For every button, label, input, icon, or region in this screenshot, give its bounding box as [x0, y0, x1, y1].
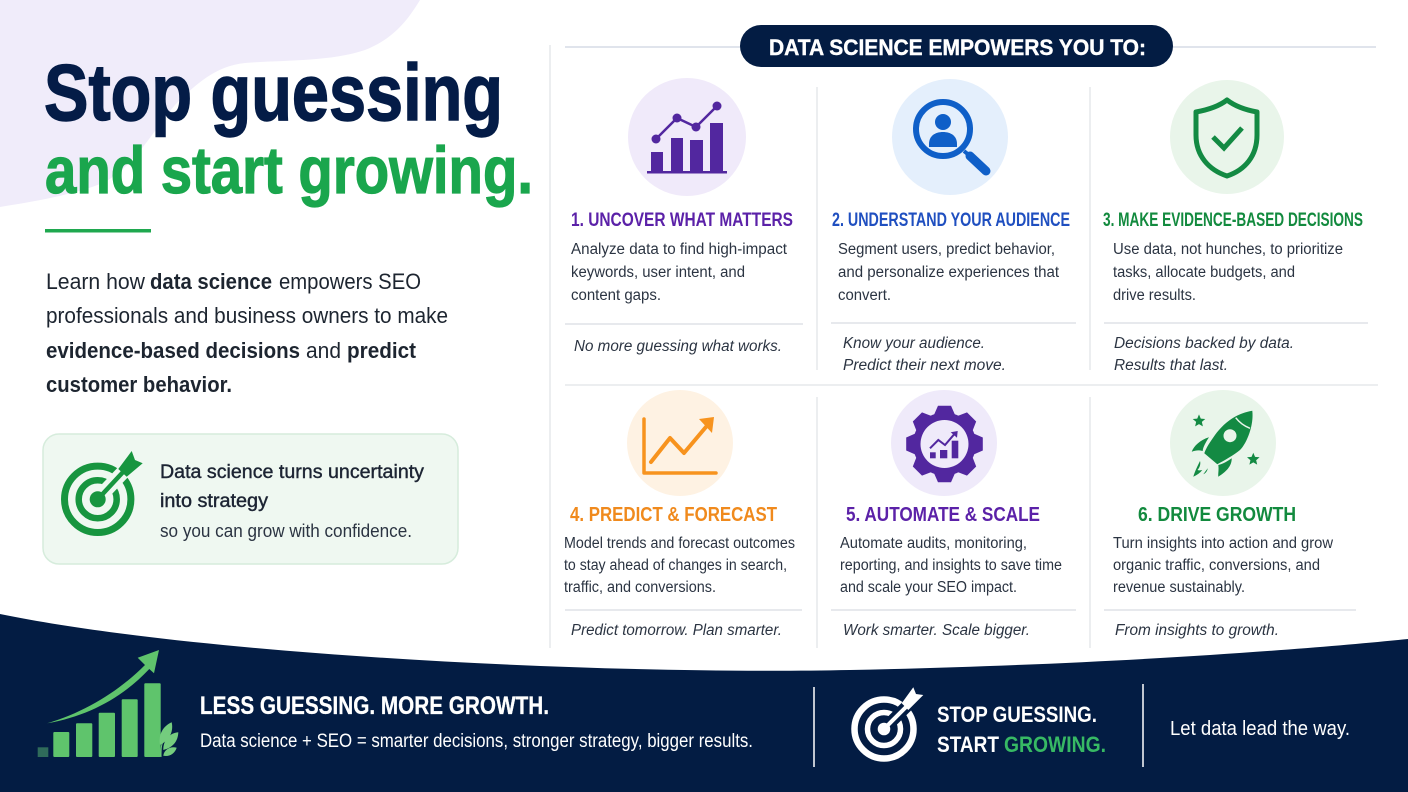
tagline: Decisions backed by data.	[1114, 335, 1294, 352]
intro paragraph: professionals and business owners to make	[46, 303, 448, 328]
intro paragraph: customer behavior.	[46, 372, 232, 397]
footer closing line: Let data lead the way.	[1170, 718, 1350, 740]
description	[838, 241, 1060, 304]
description: Automate audits, monitoring,	[840, 535, 1027, 552]
footer slogan: STOP GUESSING.	[937, 702, 1097, 727]
title: and start growing.	[45, 133, 533, 207]
description	[1113, 535, 1334, 596]
heading: 5. AUTOMATE & SCALE	[846, 504, 1040, 526]
description: Segment users, predict behavior,	[838, 241, 1055, 258]
footer headline: Data science + SEO = smarter decisions, stronger strategy, bigger results.	[200, 731, 753, 752]
footer slogan: GROWING.	[1004, 732, 1106, 757]
description: Use data, not hunches, to prioritize	[1113, 241, 1343, 258]
intro paragraph: data science	[150, 269, 272, 294]
callout: uncertainty into strategy	[43, 434, 458, 564]
icon: white target	[854, 687, 923, 758]
intro paragraph: predict	[347, 338, 417, 363]
tagline: From insights to growth.	[1115, 622, 1279, 639]
icon: green target	[64, 451, 143, 532]
heading: 1. UNCOVER WHAT MATTERS	[571, 210, 793, 231]
footer headline: LESS GUESSING. MORE GROWTH.	[200, 692, 549, 720]
title underline	[45, 229, 151, 232]
intro paragraph: and	[306, 338, 341, 363]
description	[571, 241, 788, 304]
description: traffic, and conversions.	[564, 579, 716, 596]
intro paragraph: evidence-based decisions	[46, 338, 300, 363]
description: revenue sustainably.	[1113, 579, 1245, 596]
description: Model trends and forecast outcomes	[564, 535, 795, 552]
intro paragraph: Learn how	[46, 269, 145, 294]
footer headline	[200, 692, 753, 752]
description	[564, 535, 795, 596]
icon: bar and line chart	[628, 78, 746, 196]
panel: 6 drive growth	[1104, 390, 1356, 639]
description: Turn insights into action and grow	[1113, 535, 1334, 552]
description: and personalize experiences that	[838, 264, 1060, 281]
description: content gaps.	[571, 287, 661, 304]
tagline: Work smarter. Scale bigger.	[843, 622, 1030, 639]
description: Analyze data to find high-impact	[571, 241, 788, 258]
description: convert.	[838, 287, 891, 304]
description: and scale your SEO impact.	[840, 579, 1017, 596]
panel: 3 make evidence-based decisions	[1103, 80, 1368, 374]
background blob	[0, 0, 420, 207]
footer slogan: START	[937, 732, 999, 757]
description: tasks, allocate budgets, and	[1113, 264, 1295, 281]
panel dividers	[550, 45, 1378, 648]
heading: 6. DRIVE GROWTH	[1138, 504, 1296, 526]
tagline: Results that last.	[1114, 357, 1228, 374]
description: reporting, and insights to save time	[840, 557, 1062, 574]
panel: 2 understand your audience	[831, 79, 1076, 374]
description	[840, 535, 1062, 596]
intro paragraph: empowers SEO	[279, 269, 421, 294]
callout text: Data science turns uncertainty	[160, 462, 425, 483]
icon: gear with chart	[891, 390, 997, 496]
title: Stop guessing	[44, 48, 503, 137]
heading: 2. UNDERSTAND YOUR AUDIENCE	[832, 210, 1070, 231]
footer slogan	[937, 702, 1106, 757]
description: to stay ahead of changes in search,	[564, 557, 787, 574]
tagline	[843, 335, 1006, 374]
callout text: into strategy	[160, 491, 269, 512]
description: organic traffic, conversions, and	[1113, 557, 1320, 574]
tagline: Predict their next move.	[843, 357, 1006, 374]
tagline	[1114, 335, 1294, 374]
heading: 4. PREDICT & FORECAST	[570, 504, 777, 526]
intro paragraph	[46, 269, 448, 397]
tagline: No more guessing what works.	[574, 338, 782, 355]
description: keywords, user intent, and	[571, 264, 745, 281]
panel: 1 uncover what matters	[565, 78, 803, 355]
callout text: so you can grow with confidence.	[160, 521, 412, 541]
description: drive results.	[1113, 287, 1196, 304]
icon: shield with check	[1170, 80, 1284, 194]
icon: rising trend chart	[627, 390, 733, 496]
description	[1113, 241, 1343, 304]
section header pill	[740, 25, 1173, 67]
icon: magnifier with person	[892, 79, 1008, 195]
icon: growth bars with arrow and leaves	[38, 650, 178, 757]
callout text	[160, 462, 425, 541]
tagline: Know your audience.	[843, 335, 985, 352]
panel: 5 automate and scale	[831, 390, 1076, 639]
title	[44, 48, 533, 207]
footer band	[0, 614, 1408, 792]
section header pill: DATA SCIENCE EMPOWERS YOU TO:	[769, 35, 1146, 60]
icon: rocket with stars	[1170, 390, 1276, 496]
panel: 4 predict and forecast	[564, 390, 802, 639]
tagline: Predict tomorrow. Plan smarter.	[571, 622, 782, 639]
